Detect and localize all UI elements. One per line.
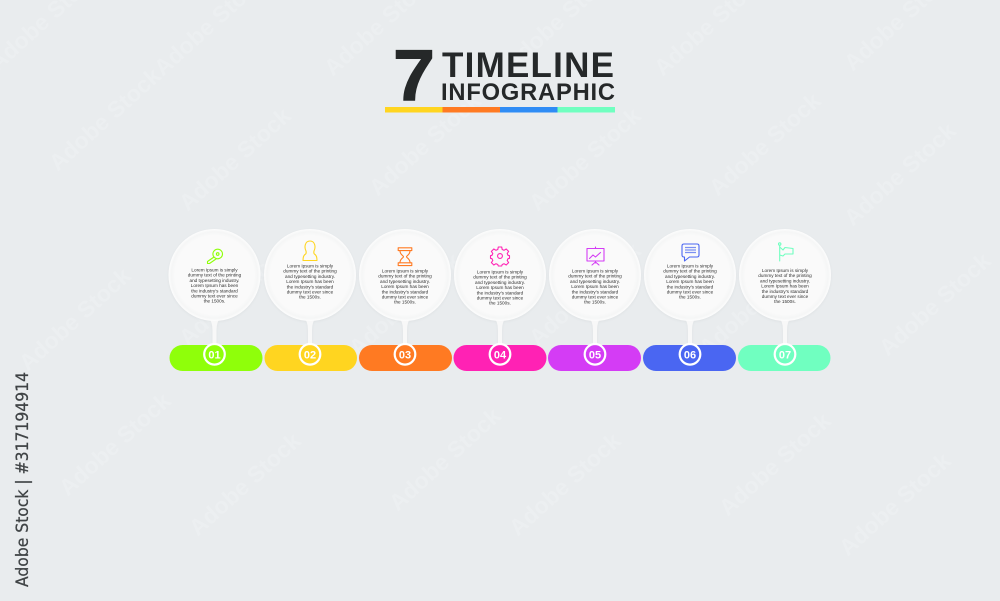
text 06: dummy text of the printing: [663, 269, 717, 274]
icon: person: [303, 241, 317, 260]
text 03: the 1500s.: [394, 300, 416, 305]
text 07: Lorem Ipsum has been: [761, 284, 809, 289]
text 05: dummy text ever since: [572, 294, 619, 300]
text 06: Lorem Ipsum has been: [666, 279, 714, 284]
text 01: dummy text of the printing: [188, 273, 242, 278]
watermark pattern: Adobe Stock: [524, 102, 646, 216]
step 07: [738, 229, 831, 371]
number badge 03: 03: [399, 349, 411, 361]
number badge 03: [395, 344, 415, 365]
text 04: Lorem Ipsum is simply: [477, 270, 524, 274]
text 01: dummy text ever since: [191, 294, 238, 298]
text 01: Lorem Ipsum is simply: [191, 268, 238, 272]
title line: TIMELINE: TIMELINE: [442, 46, 614, 85]
watermark pattern: Adobe Stock: [44, 62, 166, 176]
colour bar under title: [385, 107, 615, 112]
stem and disc 01: [168, 229, 260, 346]
number badge 07: [775, 344, 795, 365]
text 05: the 1500s.: [584, 300, 606, 305]
watermark pattern: Adobe Stock: [174, 237, 296, 351]
text 04: dummy text of the printing: [473, 275, 527, 280]
step 04: [454, 229, 546, 371]
watermark pattern: Adobe Stock: [694, 247, 816, 361]
text 07: dummy text of the printing: [758, 273, 812, 278]
stem and disc 04: [454, 229, 546, 346]
text 02: Lorem Ipsum is simply: [287, 264, 334, 268]
watermark pattern: Adobe Stock: [834, 447, 956, 561]
text 02: dummy text ever since: [287, 290, 334, 294]
pill 07: [738, 345, 830, 371]
text 02: the industry's standard: [287, 284, 334, 289]
number badge 06: [680, 344, 700, 365]
text 06: the 1500s.: [679, 295, 701, 300]
text 03: Lorem Ipsum is simply: [382, 268, 429, 274]
text 06: dummy text ever since: [667, 290, 714, 294]
stem and disc 07: [739, 229, 831, 346]
pill 04: [454, 345, 546, 371]
watermark pattern: Adobe Stock: [14, 262, 136, 376]
step 05: [548, 229, 641, 371]
text 07: dummy text ever since: [762, 294, 809, 299]
icon: flag: [778, 243, 793, 261]
text 04: dummy text ever since: [477, 296, 524, 300]
pill 02: [264, 345, 357, 371]
pill 01: [170, 345, 262, 371]
stem and disc 03: [359, 229, 451, 346]
text 01: and typesetting industry.: [190, 278, 239, 283]
number badge 05: [585, 344, 605, 365]
text 07: and typesetting industry.: [760, 278, 810, 283]
text 01: the 1500s.: [204, 299, 225, 304]
icon: key: [208, 249, 222, 264]
text 02: Lorem Ipsum has been: [286, 279, 334, 284]
text 07: the 1500s.: [774, 299, 796, 304]
text 05: and typesetting industry.: [570, 279, 620, 284]
watermark pattern: Adobe Stock: [839, 117, 961, 231]
icon: hourglass: [398, 248, 412, 266]
watermark pattern: Adobe Stock: [364, 87, 486, 201]
text 04: the industry's standard: [477, 290, 524, 295]
text 03: Lorem Ipsum has been: [381, 284, 429, 289]
text 06: the industry's standard: [667, 284, 714, 289]
watermark pattern: Adobe Stock: [704, 87, 826, 201]
text 02: and typesetting industry.: [285, 274, 335, 279]
text 05: dummy text of the printing: [568, 274, 622, 279]
number badge 01: 01: [208, 349, 221, 361]
watermark pattern: Adobe Stock: [504, 427, 626, 541]
number badge 04: [490, 344, 510, 365]
text 03: the industry's standard: [382, 289, 429, 294]
pill 06: [643, 345, 736, 371]
step 06: [643, 229, 736, 371]
pill 03: [359, 345, 452, 371]
watermark pattern: Adobe Stock: [54, 387, 176, 501]
text 06: Lorem Ipsum is simply: [667, 264, 714, 268]
text 01: the industry's standard: [191, 288, 238, 293]
title: [385, 36, 615, 116]
text 02: the 1500s.: [299, 295, 321, 300]
text 05: Lorem Ipsum is simply: [572, 268, 619, 274]
step 01: [168, 229, 262, 371]
text 03: dummy text of the printing: [378, 274, 432, 279]
number badge 04: 04: [494, 349, 507, 361]
icon: speech bubble: [682, 244, 699, 261]
number badge 05: 05: [589, 349, 601, 361]
watermark pattern: Adobe Stock: [524, 237, 646, 351]
icon: gear: [490, 247, 510, 266]
title numeral 7: 7: [393, 36, 435, 116]
watermark pattern: Adobe Stock: [384, 402, 506, 516]
watermark pattern: Adobe Stock: [184, 427, 306, 541]
watermark pattern: Adobe Stock: [874, 247, 996, 361]
stem and disc 05: [549, 229, 641, 346]
text 04: Lorem Ipsum has been: [476, 285, 524, 290]
text 05: the industry's standard: [572, 289, 619, 294]
stem and disc 06: [644, 229, 736, 346]
stem and disc 02: [264, 229, 356, 346]
side credit text: Adobe Stock | #317194914: [13, 372, 33, 587]
number badge 02: 02: [304, 349, 316, 361]
title line: INFOGRAPHIC: INFOGRAPHIC: [441, 80, 615, 106]
text 04: and typesetting industry.: [475, 280, 525, 285]
watermark pattern: Adobe Stock: [344, 247, 466, 361]
text 04: the 1500s.: [489, 301, 511, 306]
pill 05: [548, 345, 641, 371]
step 03: [359, 229, 452, 371]
text 06: and typesetting industry.: [665, 274, 715, 279]
text 07: Lorem Ipsum is simply: [762, 268, 809, 273]
text 07: the industry's standard: [762, 289, 809, 294]
icon: presentation board: [587, 247, 604, 265]
text 01: Lorem Ipsum has been: [191, 283, 239, 288]
watermark pattern: Adobe Stock: [174, 102, 296, 216]
watermark pattern: Adobe Stock: [714, 407, 836, 521]
text 02: dummy text of the printing: [283, 269, 337, 274]
number badge 02: [300, 344, 320, 365]
number badge 01: [204, 344, 225, 365]
text 03: dummy text ever since: [382, 294, 429, 300]
number badge 07: 07: [779, 349, 791, 361]
text 03: and typesetting industry.: [380, 279, 430, 284]
step 02: [264, 229, 357, 371]
text 05: Lorem Ipsum has been: [571, 284, 619, 289]
number badge 06: 06: [684, 349, 696, 361]
